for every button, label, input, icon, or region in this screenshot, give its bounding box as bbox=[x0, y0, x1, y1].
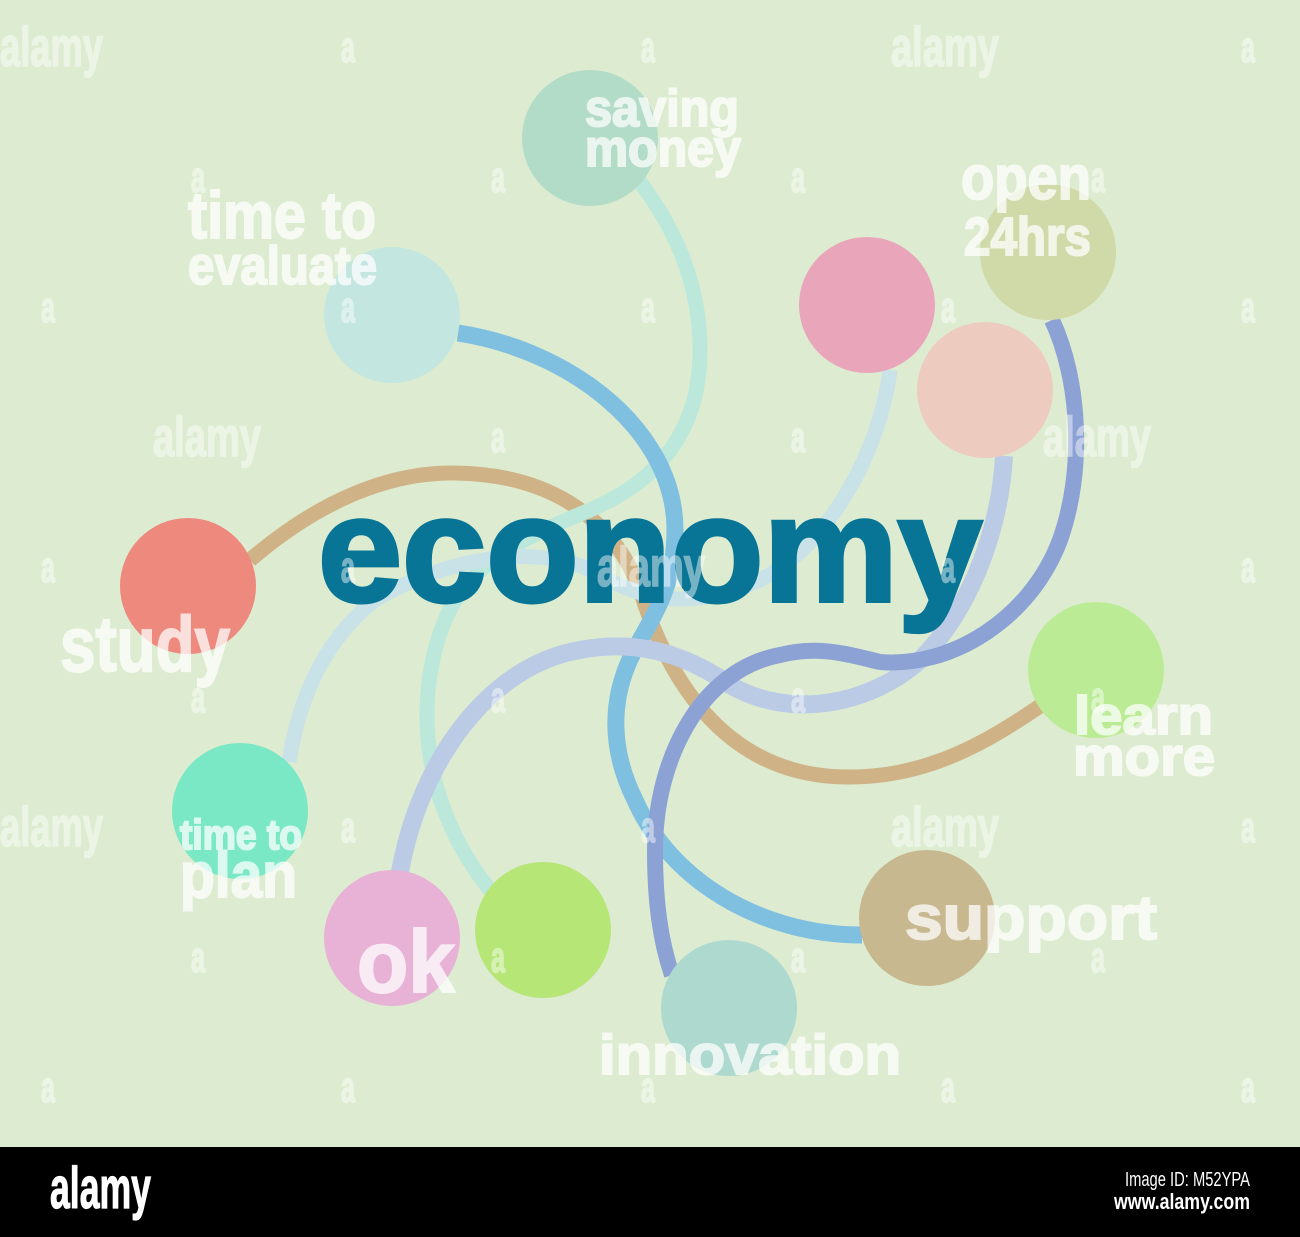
curve: saving money to green circle bbox=[427, 182, 700, 890]
watermarks: a bbox=[1241, 543, 1255, 592]
node circles bbox=[120, 70, 1164, 1076]
curve: evaluate circle to support circle bbox=[458, 333, 862, 935]
watermarks: a bbox=[41, 543, 55, 592]
watermarks: a bbox=[641, 803, 655, 852]
watermarks: alamy bbox=[891, 795, 999, 858]
node labels: innovation bbox=[599, 1023, 901, 1086]
watermarks: a bbox=[791, 933, 805, 982]
watermarks: a bbox=[641, 1063, 655, 1112]
watermarks: a bbox=[341, 283, 355, 332]
node labels: evaluate bbox=[188, 236, 377, 296]
watermarks: alamy bbox=[0, 795, 103, 858]
watermarks: a bbox=[1091, 933, 1105, 982]
watermarks: alamy bbox=[1043, 405, 1151, 468]
watermarks: a bbox=[791, 673, 805, 722]
curve: peach circle to ok circle bbox=[400, 456, 1004, 872]
node labels: saving bbox=[585, 80, 739, 138]
watermarks: a bbox=[1091, 153, 1105, 202]
watermarks: alamy bbox=[0, 15, 103, 78]
curve: open 24hrs circle to innovation circle bbox=[655, 320, 1076, 975]
watermarks: alamy bbox=[597, 535, 705, 598]
watermarks: a bbox=[941, 283, 955, 332]
watermarks: a bbox=[641, 283, 655, 332]
watermarks: a bbox=[191, 673, 205, 722]
watermarks: alamy bbox=[891, 15, 999, 78]
watermarks: a bbox=[1241, 803, 1255, 852]
node labels: ok bbox=[357, 912, 456, 1011]
watermarks: a bbox=[941, 543, 955, 592]
node labels: learn bbox=[1074, 686, 1213, 746]
curve: red circle to learn more circle bbox=[250, 473, 1040, 777]
node labels: study bbox=[60, 600, 230, 688]
watermarks: a bbox=[1241, 283, 1255, 332]
watermarks: a bbox=[491, 933, 505, 982]
watermarks: a bbox=[941, 1063, 955, 1112]
footer website: www.alamy.com bbox=[1113, 1189, 1250, 1214]
footer image id: Image ID: M52YPA bbox=[1125, 1169, 1250, 1191]
node labels: money bbox=[585, 120, 741, 178]
watermarks: a bbox=[791, 413, 805, 462]
watermarks: a bbox=[341, 803, 355, 852]
watermarks: a bbox=[341, 543, 355, 592]
footer logo: alamy bbox=[50, 1156, 151, 1221]
title: economy: economy bbox=[318, 465, 982, 633]
watermarks: a bbox=[1241, 23, 1255, 72]
watermarks: a bbox=[491, 413, 505, 462]
watermarks: a bbox=[641, 23, 655, 72]
watermarks: a bbox=[341, 23, 355, 72]
node labels bbox=[60, 80, 1215, 1086]
node labels: time to bbox=[188, 178, 376, 252]
node labels: support bbox=[905, 884, 1157, 953]
watermarks: a bbox=[191, 933, 205, 982]
watermarks: a bbox=[491, 673, 505, 722]
node labels: time to bbox=[180, 811, 302, 858]
node labels: plan bbox=[180, 839, 297, 911]
watermarks: a bbox=[491, 153, 505, 202]
watermarks: alamy bbox=[153, 405, 261, 468]
node labels: 24hrs bbox=[964, 207, 1091, 267]
watermarks: a bbox=[191, 153, 205, 202]
watermarks: a bbox=[1241, 1063, 1255, 1112]
watermarks: a bbox=[341, 1063, 355, 1112]
node labels: more bbox=[1073, 727, 1215, 787]
watermarks: a bbox=[41, 1063, 55, 1112]
watermarks: a bbox=[41, 283, 55, 332]
watermarks: a bbox=[1091, 673, 1105, 722]
watermarks: a bbox=[791, 153, 805, 202]
curve: pink circle to teal circle bbox=[289, 370, 890, 762]
node labels: open bbox=[961, 144, 1091, 213]
footer bar bbox=[0, 1147, 1300, 1237]
